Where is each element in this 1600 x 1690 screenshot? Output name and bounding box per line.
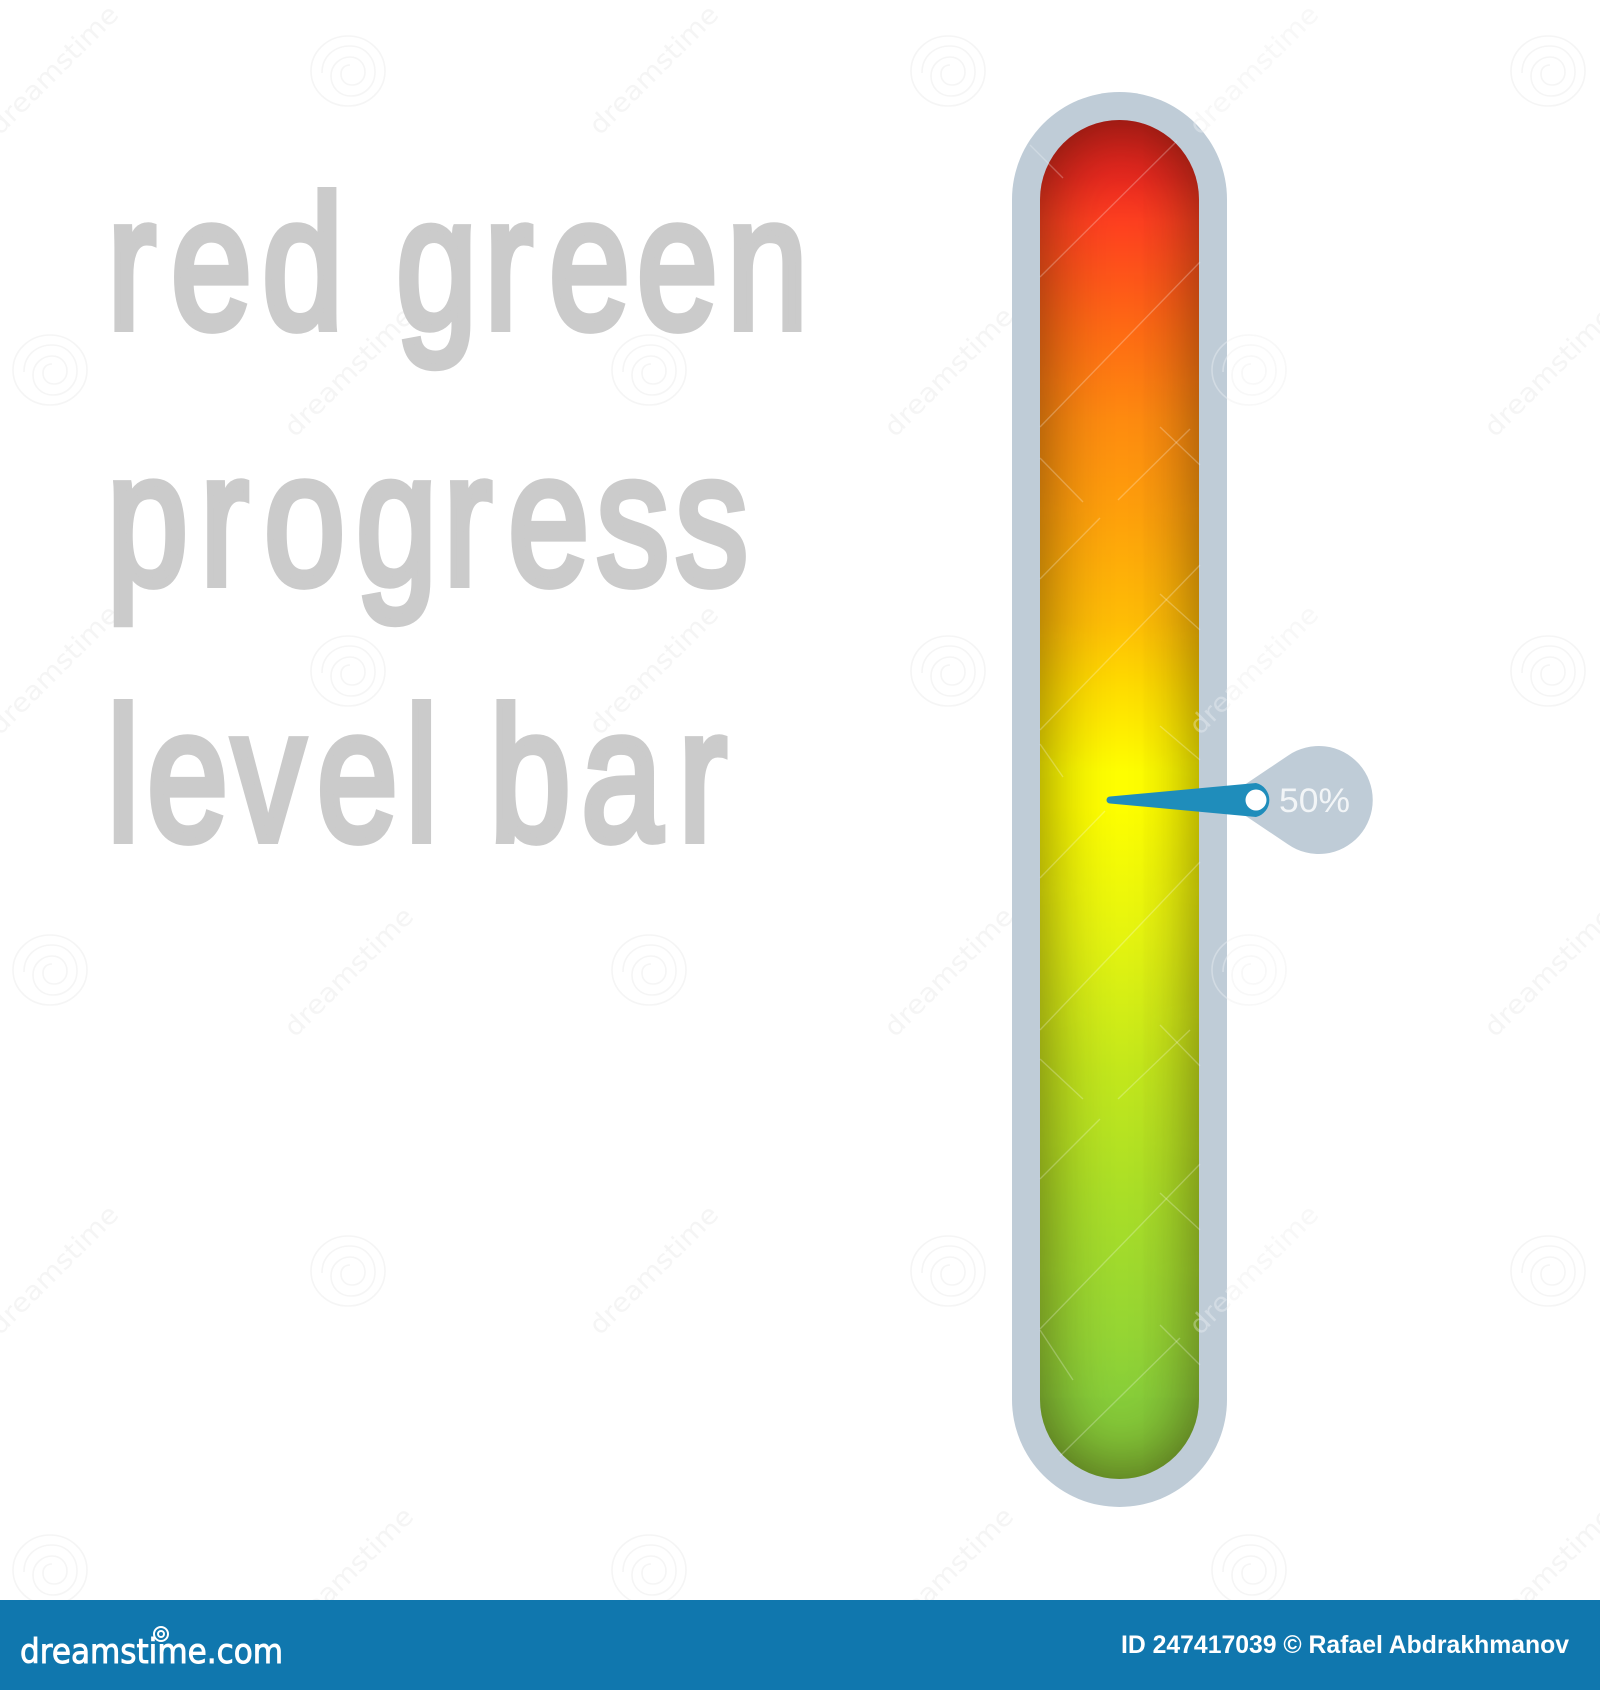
- watermark pattern: dreamstime: [1184, 0, 1325, 141]
- level bar: [1012, 92, 1227, 1507]
- watermark pattern: dreamstime: [879, 902, 1020, 1043]
- title text: red green: [107, 157, 808, 368]
- watermark pattern: dreamstime: [584, 1200, 725, 1341]
- watermark pattern: dreamstime: [1184, 1200, 1325, 1341]
- gradient fill: [1040, 120, 1199, 1479]
- needle hub: [1246, 790, 1266, 810]
- title text: level bar: [107, 669, 727, 880]
- watermark pattern: dreamstime: [279, 902, 420, 1043]
- footer band: [0, 1600, 1600, 1690]
- title text: progress: [107, 413, 748, 624]
- watermark pattern: dreamstime: [1184, 600, 1325, 741]
- watermark pattern: dreamstime: [879, 302, 1020, 443]
- watermark pattern: dreamstime: [584, 0, 725, 141]
- value label: 50%: [1279, 782, 1350, 820]
- brand spiral: [154, 1627, 168, 1641]
- watermark pattern: dreamstime: [584, 600, 725, 741]
- brand name: dreamstime.com: [20, 1632, 283, 1672]
- watermark pattern: dreamstime: [279, 302, 420, 443]
- watermark pattern: dreamstime: [279, 1502, 420, 1643]
- needle: [1107, 783, 1269, 817]
- watermark pattern: dreamstime: [879, 1502, 1020, 1643]
- watermark over bar: dreamstime: [1184, 0, 1325, 141]
- watermark over bar: dreamstime: [1184, 1200, 1325, 1341]
- watermark over bar: dreamstime: [1184, 600, 1325, 741]
- callout drop: [1222, 746, 1373, 854]
- image credit: ID 247417039 © Rafael Abdrakhmanov: [1121, 1631, 1569, 1659]
